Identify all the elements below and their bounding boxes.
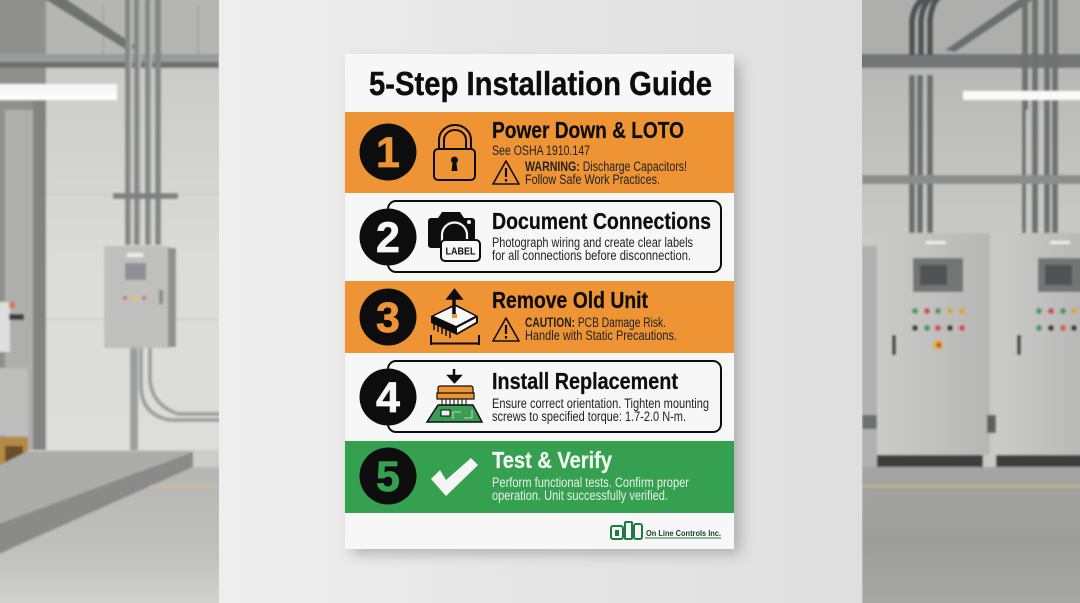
step 5 panel: test and verify — [345, 441, 734, 513]
icon: warning triangle — [493, 161, 519, 184]
step 1 number badge — [360, 124, 416, 180]
logo: On Line Controls Inc. — [611, 522, 721, 539]
step 3 number badge: 3 — [376, 294, 400, 342]
step 2 description: Photograph wiring and create clear labels — [492, 235, 693, 250]
step 5 description: operation. Unit successfully verified. — [492, 488, 668, 503]
background: central white wall — [219, 0, 862, 603]
icon: caution triangle — [493, 318, 519, 341]
step 1 warning text: Follow Safe Work Practices. — [525, 172, 660, 187]
icon: camera with label — [428, 212, 480, 261]
step 1 reference: See OSHA 1910.147 — [492, 143, 590, 158]
step 1 warning text: WARNING: Discharge Capacitors! — [525, 159, 687, 174]
step 3 caution text: CAUTION: PCB Damage Risk. — [525, 315, 666, 330]
poster: installation guide — [345, 54, 734, 549]
step 5 number badge: 5 — [376, 453, 400, 501]
poster shadow — [352, 62, 740, 554]
step 2 heading: Document Connections — [492, 208, 711, 234]
step 2 description: for all connections before disconnection. — [492, 248, 691, 263]
icon: chip onto circuit board — [427, 369, 482, 422]
step 5 description — [492, 475, 689, 503]
step 3 panel: remove old unit — [345, 281, 734, 353]
step 5 description: Perform functional tests. Confirm proper — [492, 475, 689, 490]
step 3 caution text: Handle with Static Precautions. — [525, 328, 677, 343]
step 4 number badge: 4 — [376, 374, 400, 422]
icon: check mark — [431, 458, 478, 496]
step 2 number badge: 2 — [376, 214, 400, 262]
step 2 number badge — [360, 208, 416, 266]
step 5 number badge — [360, 448, 416, 504]
step 5 heading: Test & Verify — [492, 447, 612, 473]
step 3 number badge — [360, 288, 416, 346]
icon: padlock — [434, 125, 475, 180]
title: 5-Step Installation Guide — [369, 65, 712, 102]
step 4 description: screws to specified torque: 1.7-2.0 N-m. — [492, 409, 686, 424]
step 4 number badge — [360, 368, 416, 426]
step 4 description — [492, 396, 709, 424]
step 1 panel: power down — [345, 112, 734, 193]
icon: chip lifted out — [431, 291, 479, 345]
step 1 number badge: 1 — [376, 129, 400, 177]
step 1 heading: Power Down & LOTO — [492, 117, 684, 143]
background: right factory scene — [858, 0, 1080, 603]
step 3 caution text — [525, 315, 677, 343]
step 1 warning text — [525, 159, 687, 187]
step 2 description — [492, 235, 693, 263]
step 4 panel: install replacement — [360, 361, 721, 432]
step 4 heading: Install Replacement — [492, 368, 678, 394]
logo: On Line Controls Inc.: On Line Controls Inc. — [646, 528, 721, 538]
step 2 panel: document connections — [360, 201, 721, 272]
icon: camera with label: LABEL — [446, 246, 476, 258]
background: left factory scene — [0, 0, 225, 603]
step 4 description: Ensure correct orientation. Tighten mounting — [492, 396, 709, 411]
step 3 heading: Remove Old Unit — [492, 287, 648, 313]
